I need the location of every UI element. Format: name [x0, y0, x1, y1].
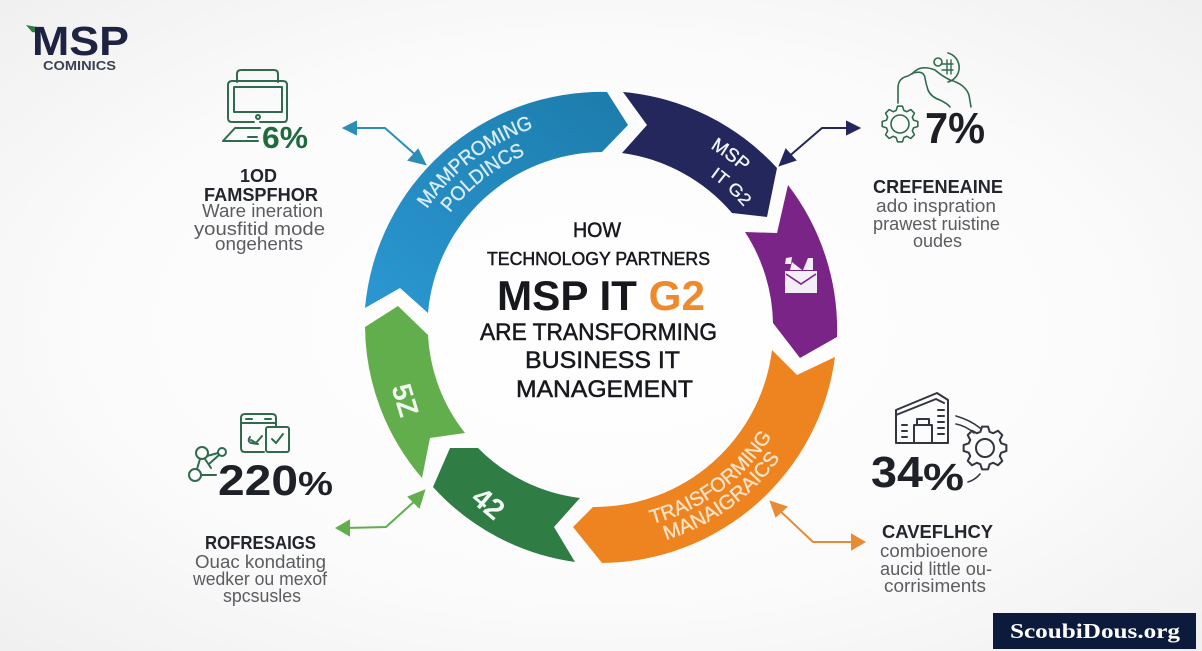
watermark: [993, 613, 1196, 649]
panel: bottom right stat: %: [923, 457, 964, 499]
panel: bottom left stat: spcsusles: [223, 586, 301, 606]
segment: purple: [745, 185, 837, 358]
arrow: blue: [344, 122, 425, 164]
panel: bottom left stat: ROFRESAIGS: [205, 533, 316, 553]
panel: top right stat: oudes: [913, 231, 962, 251]
panel: bottom right stat: corrisiments: [884, 576, 986, 596]
panel: bottom left stat: wedker ou mexof: [192, 569, 328, 589]
panel: bottom left stat: 220: [218, 457, 298, 505]
segment: navy: MSP: [711, 138, 750, 166]
arrow: navy: [780, 122, 859, 165]
segment: dark green: 42: [465, 481, 510, 527]
panel: top left stat: FAMSPFHOR: [204, 185, 318, 205]
segment: orange: TRAISFORMING: [648, 431, 770, 523]
center title: BUSINESS IT: [525, 347, 680, 374]
center title: MANAGEMENT: [516, 376, 693, 403]
panel: top left stat: [194, 70, 325, 254]
icon: windows and network: [189, 414, 289, 481]
segment: blue: MAMPROMING: [416, 116, 532, 208]
center title: [480, 219, 717, 403]
panel: bottom right stat: aucid little ou-: [880, 559, 992, 579]
panel: bottom right stat: 34: [871, 448, 924, 497]
segment: dark green: [433, 448, 580, 562]
center title: MSP IT G2: [497, 272, 705, 319]
panel: top right stat: prawest ruistine: [873, 214, 1000, 234]
center title: ARE TRANSFORMING: [480, 319, 717, 346]
segment: light green: 5Z: [385, 380, 425, 420]
segment: blue: POLDINCS: [440, 144, 524, 212]
panel: bottom right stat: CAVEFLHCY: [882, 522, 993, 542]
watermark: ScoubiDous.org: [1010, 619, 1181, 643]
panel: top left stat: yousfitid mode: [194, 219, 325, 239]
segment: orange: [573, 350, 835, 563]
arrow: orange: [771, 502, 864, 549]
center title: HOW: [573, 219, 621, 242]
panel: top left stat: ongehents: [215, 234, 303, 254]
panel: bottom left stat: %: [298, 465, 333, 502]
center title: TECHNOLOGY PARTNERS: [487, 249, 710, 269]
cycle ring: [365, 92, 838, 563]
panel: bottom left stat: [189, 414, 333, 606]
panel: top left stat: 1OD: [240, 166, 277, 186]
segment: blue: [365, 92, 628, 313]
panel: bottom right stat: combioenore: [880, 541, 988, 561]
segment: light green: [365, 306, 465, 478]
arrow: green: [337, 491, 424, 535]
segment: navy: [622, 92, 777, 217]
icon: computer: [223, 70, 287, 141]
logo: MSP Cominics: MSP: [32, 18, 129, 64]
panel: top right stat: CREFENEAINE: [873, 177, 1003, 197]
panel: bottom right stat: [871, 393, 1006, 596]
panel: top right stat: ado inspration: [876, 196, 996, 216]
icon: building and gear: [896, 393, 1006, 482]
icon: briefcase: [785, 257, 817, 293]
panel: top right stat: [873, 53, 1003, 251]
panel: top left stat: 6%: [262, 120, 308, 155]
panel: bottom left stat: Ouac kondating: [195, 552, 326, 572]
icon: gear and network: [882, 53, 971, 142]
panel: top left stat: Ware ineration: [202, 201, 323, 221]
logo: MSP Cominics: COMINICS: [43, 58, 116, 73]
panel: top right stat: 7%: [925, 104, 985, 153]
segment: navy: IT G2: [711, 167, 751, 206]
segment: orange: MANAIGRAICS: [662, 452, 778, 540]
